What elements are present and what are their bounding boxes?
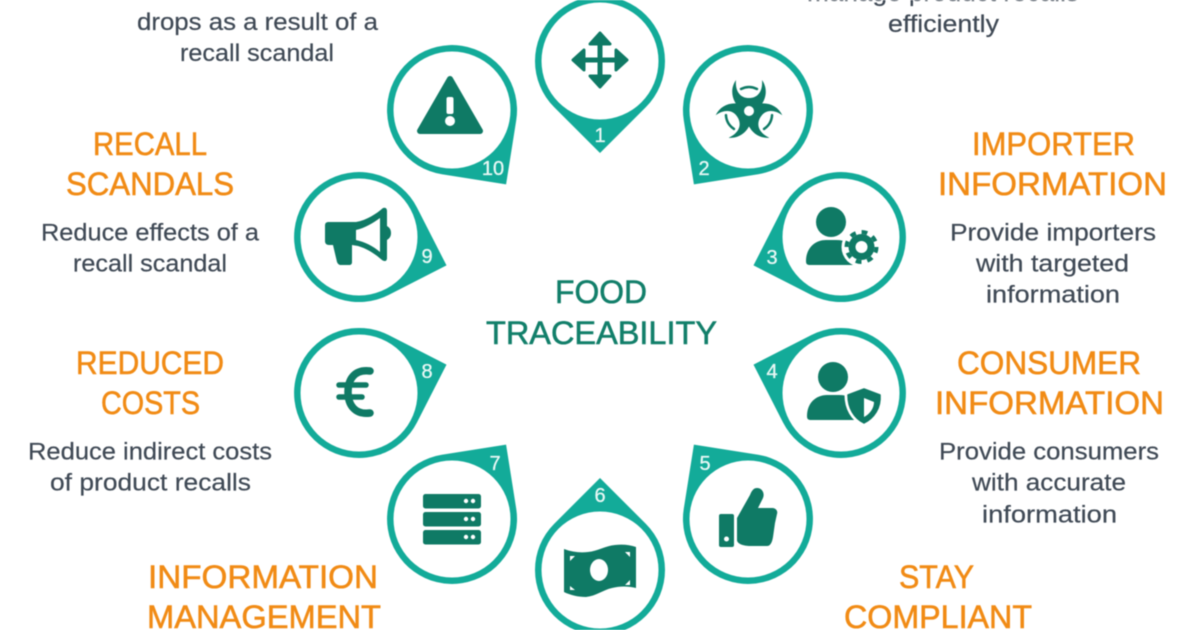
icon: megaphone	[325, 208, 391, 265]
pin 8: euro: 8	[421, 361, 433, 383]
text block: consumer information	[935, 345, 1164, 528]
text block: recall scandals: recall scandal	[73, 250, 227, 278]
text block: importer information: Provide importers	[950, 220, 1156, 246]
text block: cropped top right: efficiently	[888, 11, 1000, 38]
pin 4: user with shield: 4	[766, 361, 778, 383]
text block: reduced costs: COSTS	[101, 385, 200, 421]
pin 9: megaphone	[277, 155, 467, 327]
center title	[486, 274, 717, 351]
pin 6: banknote: 6	[594, 485, 606, 507]
text block: recall scandals	[41, 126, 259, 278]
text block: information management: INFORMATION	[148, 559, 378, 595]
text block: consumer information: information	[982, 502, 1117, 528]
icon: user with shield	[807, 362, 880, 423]
pin 4: user with shield	[733, 303, 923, 475]
text block: reduced costs: REDUCED	[76, 345, 224, 381]
text block: importer information: with targeted	[975, 250, 1129, 278]
text block: reduced costs: Reduce indirect costs	[28, 438, 272, 466]
pin 3: user with gear: 3	[766, 247, 778, 269]
text block: information management	[147, 559, 381, 630]
center title: TRACEABILITY	[486, 315, 717, 351]
text block: reduced costs: of product recalls	[50, 470, 251, 496]
pin 3: user with gear	[733, 155, 923, 327]
icon: banknote	[564, 545, 636, 597]
icon: thumbs up	[719, 488, 777, 547]
text block: importer information: INFORMATION	[938, 166, 1167, 202]
text block: reduced costs	[28, 345, 272, 496]
pin 2: biohazard: 2	[698, 158, 710, 180]
pin 8: euro	[277, 303, 467, 475]
center title: FOOD	[555, 274, 647, 310]
pin 5: thumbs up: 5	[699, 453, 711, 475]
pin 10: warning	[361, 19, 559, 223]
pin 2: biohazard	[641, 19, 839, 223]
text block: importer information: IMPORTER	[972, 126, 1135, 162]
text block: cropped top left: recall scandal	[180, 40, 334, 67]
pin 1: move arrows: 1	[594, 125, 606, 147]
text block: cropped top left: drops as a result of a	[137, 9, 378, 36]
text block: consumer information: with accurate	[971, 470, 1126, 496]
pin 7: server	[361, 406, 559, 610]
pin 5: thumbs up	[641, 406, 839, 610]
pin 9: megaphone: 9	[421, 246, 433, 268]
icon: move arrows	[573, 33, 627, 87]
pin 10: warning: 10	[482, 158, 504, 180]
text block: consumer information: INFORMATION	[935, 385, 1164, 421]
icon: server	[423, 494, 481, 544]
icon: warning triangle	[420, 79, 480, 131]
text block: recall scandals: Reduce effects of a	[41, 220, 259, 246]
text block: consumer information: Provide consumers	[939, 438, 1159, 466]
text block: recall scandals: SCANDALS	[66, 166, 234, 202]
icon: euro sign	[339, 371, 370, 413]
text block: consumer information: CONSUMER	[957, 345, 1141, 381]
text block: cropped top right	[807, 0, 1079, 38]
pin 6: banknote	[535, 478, 665, 630]
pin 7: server: 7	[489, 453, 501, 475]
text block: recall scandals: RECALL	[93, 126, 207, 162]
text block: stay compliant	[844, 559, 1032, 630]
text block: importer information	[938, 126, 1167, 308]
text block: stay compliant: STAY	[899, 559, 974, 595]
icon: biohazard	[714, 80, 784, 141]
pin 1: move arrows	[535, 0, 665, 153]
icon: user with gear	[806, 207, 882, 267]
text block: importer information: information	[986, 282, 1120, 308]
text block: cropped top left	[137, 0, 378, 67]
